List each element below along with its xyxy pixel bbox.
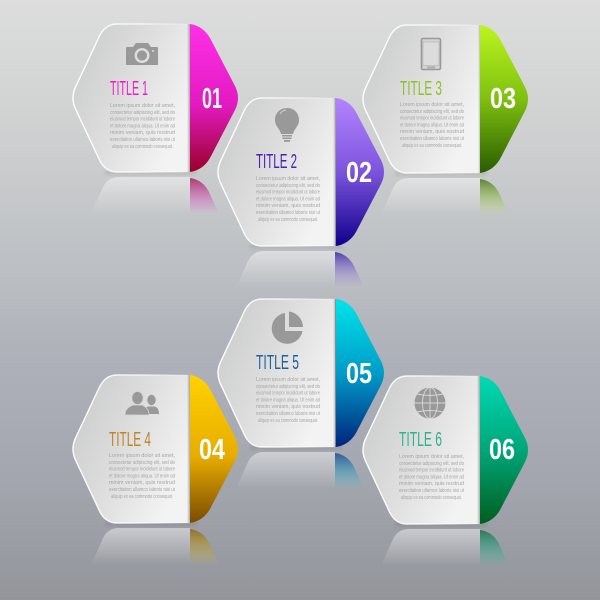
title 6: TITLE 6 bbox=[399, 428, 442, 451]
number 01: 01 bbox=[202, 83, 222, 115]
body text 6: exercitation ullamco laboris nisi ut bbox=[399, 488, 464, 494]
body text 2: exercitation ullamco laboris nisi ut bbox=[256, 210, 320, 216]
split shadow 2 bbox=[333, 98, 336, 246]
body text 4: aliquip ex ea commodo consequat. bbox=[111, 494, 173, 500]
body text 4: Lorem ipsum dolor sit amet, bbox=[109, 453, 175, 459]
panel 4 bbox=[73, 375, 190, 523]
card 2 bbox=[218, 98, 384, 288]
body text 5 bbox=[256, 377, 320, 424]
body text 5: minim veniam, quis nostrud bbox=[256, 404, 320, 410]
body text 6: et dolore magna aliqua. Ut enim ad bbox=[399, 474, 464, 480]
body text 1: Lorem ipsum dolor sit amet, bbox=[110, 103, 175, 109]
title 3: TITLE 3 bbox=[400, 77, 442, 100]
icon: pie chart bbox=[272, 312, 303, 344]
icon: people bbox=[125, 392, 159, 415]
title 1: TITLE 1 bbox=[110, 77, 148, 100]
reflection 5 bbox=[236, 452, 364, 489]
shadow 4 bbox=[105, 521, 197, 526]
body text 5: et dolore magna aliqua. Ut enim ad bbox=[256, 397, 320, 403]
body text 2: consectetur adipiscing elit, sed do bbox=[256, 183, 320, 189]
number 04: 04 bbox=[199, 434, 225, 466]
body text 1: eiusmod tempor incididunt ut labore bbox=[110, 117, 175, 123]
body text 3: eiusmod tempor incididunt ut labore bbox=[400, 116, 464, 122]
body text 5: consectetur adipiscing elit, sed do bbox=[256, 384, 320, 390]
body text 6: Lorem ipsum dolor sit amet, bbox=[399, 454, 464, 460]
panel 6 bbox=[363, 376, 480, 524]
number 03: 03 bbox=[490, 83, 516, 115]
body text 3: minim veniam, quis nostrud bbox=[400, 129, 464, 135]
reflection 1 bbox=[91, 177, 219, 214]
body text 4: consectetur adipiscing elit, sed do bbox=[109, 460, 175, 466]
number 06: 06 bbox=[489, 434, 515, 466]
card 5 bbox=[218, 299, 384, 489]
body text 3 bbox=[400, 102, 464, 149]
title 5: TITLE 5 bbox=[256, 351, 299, 374]
body text 2: aliquip ex ea commodo consequat. bbox=[258, 217, 318, 223]
body text 2: Lorem ipsum dolor sit amet, bbox=[256, 176, 320, 182]
body text 1: exercitation ullamco laboris nisi ut bbox=[110, 137, 175, 143]
colour tab 2 bbox=[336, 98, 384, 246]
body text 1 bbox=[110, 103, 175, 150]
card 6 bbox=[363, 376, 528, 566]
reflection 3 bbox=[381, 178, 509, 215]
colour tab 1 bbox=[190, 24, 238, 172]
body text 2: et dolore magna aliqua. Ut enim ad bbox=[256, 196, 320, 202]
shadow 6 bbox=[395, 522, 487, 527]
icon: light bulb bbox=[275, 108, 299, 142]
body text 5: exercitation ullamco laboris nisi ut bbox=[256, 411, 320, 417]
body text 6: aliquip ex ea commodo consequat. bbox=[401, 495, 462, 501]
shadow 5 bbox=[250, 445, 342, 450]
body text 2: minim veniam, quis nostrud bbox=[256, 203, 320, 209]
shadow 3 bbox=[395, 171, 487, 176]
body text 1: minim veniam, quis nostrud bbox=[110, 130, 175, 136]
body text 4: exercitation ullamco laboris nisi ut bbox=[109, 487, 175, 493]
colour tab 5 bbox=[336, 299, 384, 447]
body text 1: consectetur adipiscing elit, sed do bbox=[110, 110, 175, 116]
shadow 2 bbox=[250, 244, 342, 249]
title 2: TITLE 2 bbox=[256, 150, 297, 173]
colour tab 3 bbox=[480, 25, 528, 173]
body text 4: eiusmod tempor incididunt ut labore bbox=[109, 467, 175, 473]
split shadow 3 bbox=[478, 25, 481, 173]
split shadow 6 bbox=[477, 376, 480, 524]
body text 4: et dolore magna aliqua. Ut enim ad bbox=[109, 473, 175, 479]
body text 2: eiusmod tempor incididunt ut labore bbox=[256, 190, 320, 196]
icon: phone bbox=[422, 38, 440, 70]
card 1 bbox=[73, 24, 238, 214]
split shadow 5 bbox=[333, 299, 336, 447]
body text 2 bbox=[256, 176, 320, 223]
body text 6: eiusmod tempor incididunt ut labore bbox=[399, 468, 464, 474]
body text 5: eiusmod tempor incididunt ut labore bbox=[256, 391, 320, 397]
body text 6: minim veniam, quis nostrud bbox=[399, 481, 464, 487]
icon: globe bbox=[414, 388, 446, 418]
body text 1: aliquip ex ea commodo consequat. bbox=[112, 144, 173, 150]
reflection 2 bbox=[236, 251, 364, 288]
shadow 1 bbox=[105, 170, 197, 175]
title 4: TITLE 4 bbox=[109, 428, 151, 451]
body text 3: exercitation ullamco laboris nisi ut bbox=[400, 136, 464, 142]
body text 4 bbox=[109, 453, 175, 500]
body text 6 bbox=[399, 454, 464, 501]
body text 3: Lorem ipsum dolor sit amet, bbox=[400, 102, 464, 108]
card 4 bbox=[73, 375, 238, 565]
body text 4: minim veniam, quis nostrud bbox=[109, 480, 175, 486]
number 02: 02 bbox=[346, 157, 372, 189]
reflection 6 bbox=[381, 529, 509, 566]
body text 6: consectetur adipiscing elit, sed do bbox=[399, 461, 464, 467]
panel 2 bbox=[218, 98, 335, 246]
body text 5: Lorem ipsum dolor sit amet, bbox=[256, 377, 320, 383]
number 05: 05 bbox=[346, 358, 372, 390]
body text 3: et dolore magna aliqua. Ut enim ad bbox=[400, 122, 464, 128]
body text 3: consectetur adipiscing elit, sed do bbox=[400, 109, 464, 115]
reflection 4 bbox=[91, 528, 219, 565]
colour tab 4 bbox=[190, 375, 238, 523]
card 3 bbox=[363, 25, 528, 215]
body text 3: aliquip ex ea commodo consequat. bbox=[402, 143, 462, 149]
colour tab 6 bbox=[480, 376, 528, 524]
body text 5: aliquip ex ea commodo consequat. bbox=[258, 418, 318, 424]
panel 1 bbox=[73, 24, 190, 172]
icon: camera bbox=[126, 43, 158, 65]
split shadow 4 bbox=[187, 375, 190, 523]
panel 5 bbox=[218, 299, 335, 447]
panel 3 bbox=[363, 25, 480, 173]
split shadow 1 bbox=[187, 24, 190, 172]
body text 1: et dolore magna aliqua. Ut enim ad bbox=[110, 123, 175, 129]
